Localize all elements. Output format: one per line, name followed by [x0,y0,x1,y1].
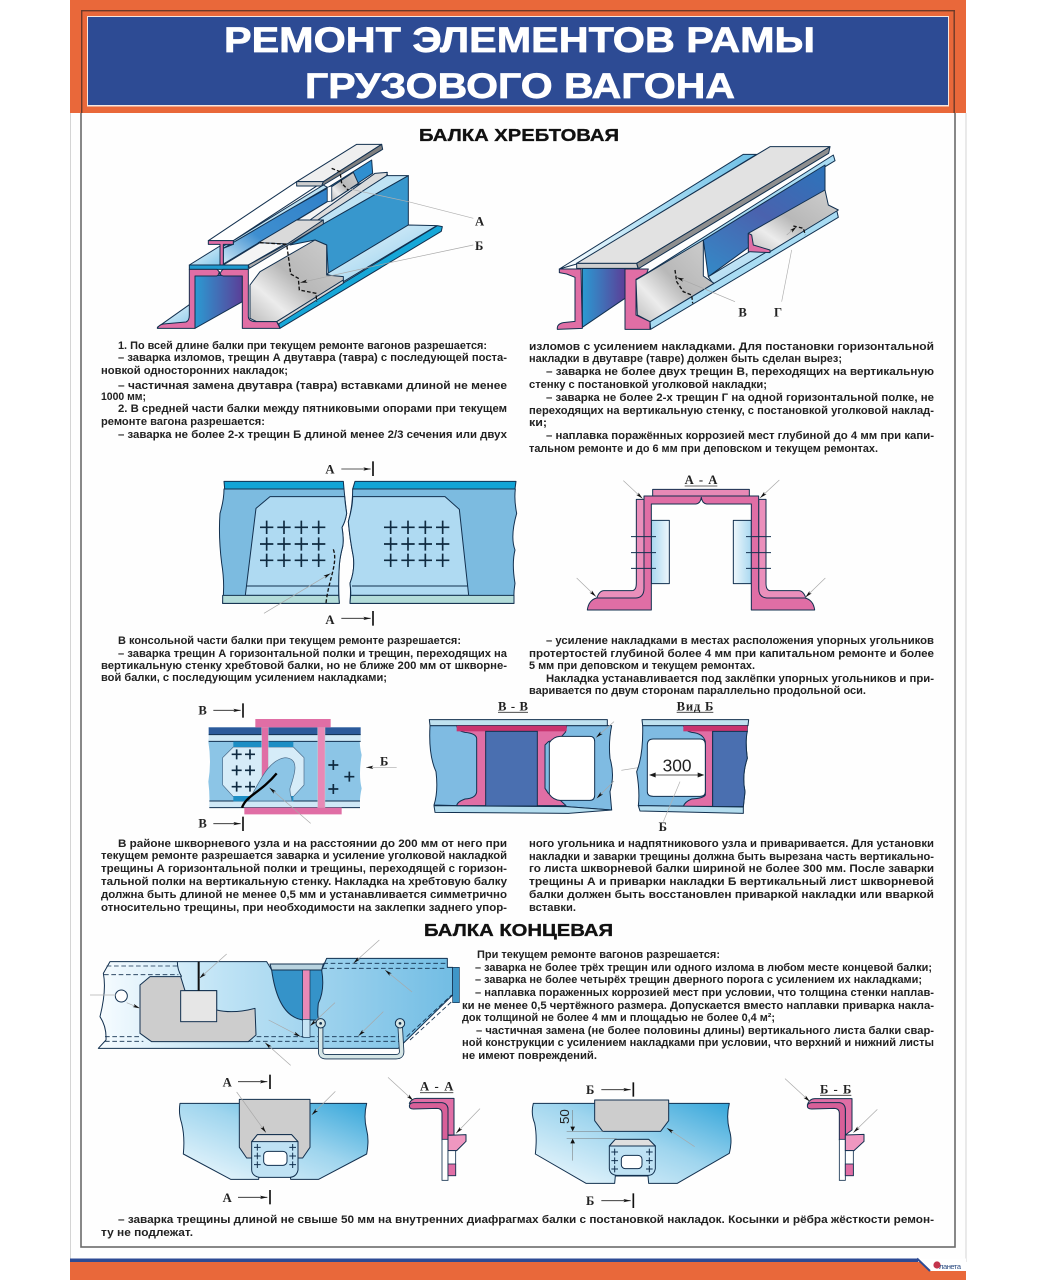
text block: end beam: – заварка не более трёх трещин или одного излома в любом месте концевой балки; [475,962,932,974]
diagram: sections B-B and view Б [429,699,749,834]
text block 2 right [529,635,934,697]
text block 3 right: балки должен быть восстановлен приваркой накладки или вваркой [529,889,934,901]
diagram: spine beam left [157,144,485,328]
text block 3 right [529,838,934,914]
label Б: Б [659,820,667,834]
text block: end beam: – заварка не более четырёх трещин дверного порога с усилением их накладками; [475,974,922,986]
section marker bottom: А [223,1191,233,1205]
text block 1 right: тальном ремонте и до 6 мм при деповском и текущем ремонтах. [529,443,878,455]
text block 3 left: тальной полки на вертикальную стенку. Накладка на хребтовую балку [101,876,507,888]
heading Б-Б: Б - Б [820,1082,851,1096]
text block 1 left: – заварка изломов, трещин А двутавра (тавра) с последующей поста- [118,352,507,364]
diagram: section A-A [577,473,825,610]
text block 2 left: – заварка трещин А горизонтальной полки и трещин, переходящих на [118,648,508,660]
text block 1 right: стенку с постановкой уголковой накладки; [529,379,767,391]
section marker bottom: Б [586,1194,594,1208]
text block: end beam: – наплавка пораженных коррозией мест при условии, что толщина стенки наплав- [475,987,934,999]
text block 1 right: – заварка не более 2-х трещин Г на одной горизонтальной полке, не [546,392,934,404]
text block 1 left: новкой односторонних накладок; [101,365,288,377]
text block 2 left [101,635,508,684]
dimension 300: 300 [663,756,692,776]
diagram: end beam detail A [179,1075,480,1205]
label В: В [738,306,747,320]
section marker top: Б [586,1083,594,1097]
section marker top [198,703,243,718]
text block: end beam: док толщиной не более 4 мм и площадью не более 0,4 м²; [462,1012,775,1024]
text block 3 left: В районе шкворневого узла и на расстоянии до 200 мм от него при [118,838,507,850]
text block 1 left: – частичная замена двутавра (тавра) вставками длиной не менее [118,380,507,392]
heading B-B: В - В [498,699,529,713]
text block: end beam [462,949,934,1062]
section marker bottom: В [198,817,207,831]
label Г: Г [774,306,782,320]
text block 2 right: протертостей глубиной более 4 мм при капитальном ремонте и более [529,648,934,660]
section marker top: А [223,1076,233,1090]
section marker top [586,1082,633,1097]
text block 2 right: 5 мм при деповском и текущем ремонтах. [529,660,755,672]
text block 1 right: – заварка не более двух трещин В, переходящих на вертикальную [546,366,934,378]
text block: end beam: ной конструкции с усилением накладками при условии, что верхний и нижний листы [462,1037,934,1049]
text block 3 right: накладки и заварки трещины должна быть вырезана часть вертикально- [529,851,934,863]
heading: end beam: БАЛКА КОНЦЕВАЯ [424,920,613,940]
section marker top [223,1075,270,1090]
footer note [101,1214,934,1239]
title: РЕМОНТ ЭЛЕМЕНТОВ РАМЫ [224,20,815,60]
rivets [260,521,449,567]
diagram: end beam detail Б [532,1079,877,1208]
diagram: kingpin repair plan [198,703,397,831]
text block 2 right: – усиление накладками в местах расположения упорных угольников [546,635,934,647]
label Б: Б [380,755,388,769]
text block 3 left: трещины А горизонтальной полки и трещины, переходящей с горизон- [101,863,507,875]
text block 1 left [101,340,507,441]
title [224,20,815,106]
dimension 50: 50 [557,1109,572,1124]
text block: end beam: не имеют повреждений. [462,1050,597,1062]
section marker top: В [198,703,207,717]
logo: ланета [939,1262,962,1271]
text block: end beam: – частичная замена (не более половины длины) вертикального листа балки свар- [476,1025,934,1037]
label Б: Б [475,239,483,253]
text block 2 right: варивается по двум сторонам параллельно продольной оси. [529,685,866,697]
text block 2 left: вой балки, с последующим усилением накладками; [101,672,387,684]
footer note: ту не подлежат. [101,1227,193,1239]
text block 1 left: 1000 мм; [101,391,146,403]
footer band [70,1258,966,1280]
text block 1 left: 2. В средней части балки между пятниковыми опорами при текущем [118,403,507,415]
footer note: – заварка трещины длиной не свыше 50 мм на внутренних диафрагмах балки с постановкой накладок. Косынки и рёбра жёсткости ремон- [118,1214,934,1226]
text block 2 left: В консольной части балки при текущем ремонте разрешается: [118,635,461,647]
text block 1 right: ки; [529,417,547,429]
text block 3 left: относительно трещины, при необходимости на заклепки заднего упор- [101,902,507,914]
section marker bottom [586,1193,633,1208]
text block 3 right: вставки. [529,902,576,914]
section marker bottom [223,1190,270,1205]
heading A-A: А - А [420,1080,454,1094]
label А: А [475,215,485,229]
text block 2 left: вертикальную стенку хребтовой балки, но не ближе 200 мм от шкворне- [101,660,507,672]
text block 3 right: го листа шкворневой балки шириной не более 300 мм. После заварки [529,863,934,875]
text block 1 right: переходящих на вертикальную стенку, с постановкой уголковой наклад- [529,405,934,417]
text block 3 left: должна быть длиной не менее 0,5 мм и устанавливается симметрично [101,889,507,901]
text block 1 right [529,341,934,455]
text block 3 left [101,838,507,914]
heading A-A: А - А [685,473,718,487]
section marker top: А [325,462,335,476]
section marker bottom [325,611,373,627]
section marker bottom: А [325,613,335,627]
text block 3 right: трещины А и приварки накладки Б вертикальный лист шкворневой [529,876,934,888]
text block: end beam: ки не менее 0,5 чертёжного размера. Допускается вместо наплавки приварка накла- [462,1000,934,1012]
diagram: spine beam right [557,147,838,329]
section marker top [325,461,373,476]
text block 1 left: ремонте вагона разрешается: [101,416,265,428]
section marker bottom [198,817,243,831]
text block 1 right: накладки в двутавре (тавре) должен быть сделан вырез; [529,353,842,365]
header band [70,0,966,113]
text block 3 left: текущем ремонте разрешается заварка и усиление уголковой накладкой [101,850,507,862]
heading: spine beam: БАЛКА ХРЕБТОВАЯ [419,125,619,145]
text block 2 right: Накладка устанавливается под заклёпки упорных угольников и при- [546,673,934,685]
text block 1 right: – наплавка поражённых коррозией мест глубиной до 4 мм при капи- [546,430,934,442]
text block 3 right: ного угольника и надпятникового узла и приваривается. Для установки [529,838,934,850]
text block 1 left: 1. По всей длине балки при текущем ремонте вагонов разрешается: [118,340,487,352]
title: ГРУЗОВОГО ВАГОНА [305,66,735,106]
heading view Б: Вид Б [677,699,713,713]
text block 1 right: изломов с усилением накладками. Для постановки горизонтальной [529,341,934,353]
text block: end beam: При текущем ремонте вагонов разрешается: [477,949,720,961]
diagram: end beam side view [90,940,459,1065]
text block 1 left: – заварка не более 2-х трещин Б длиной менее 2/3 сечения или двух [118,429,507,441]
diagram: section plan with rivets [219,461,517,627]
